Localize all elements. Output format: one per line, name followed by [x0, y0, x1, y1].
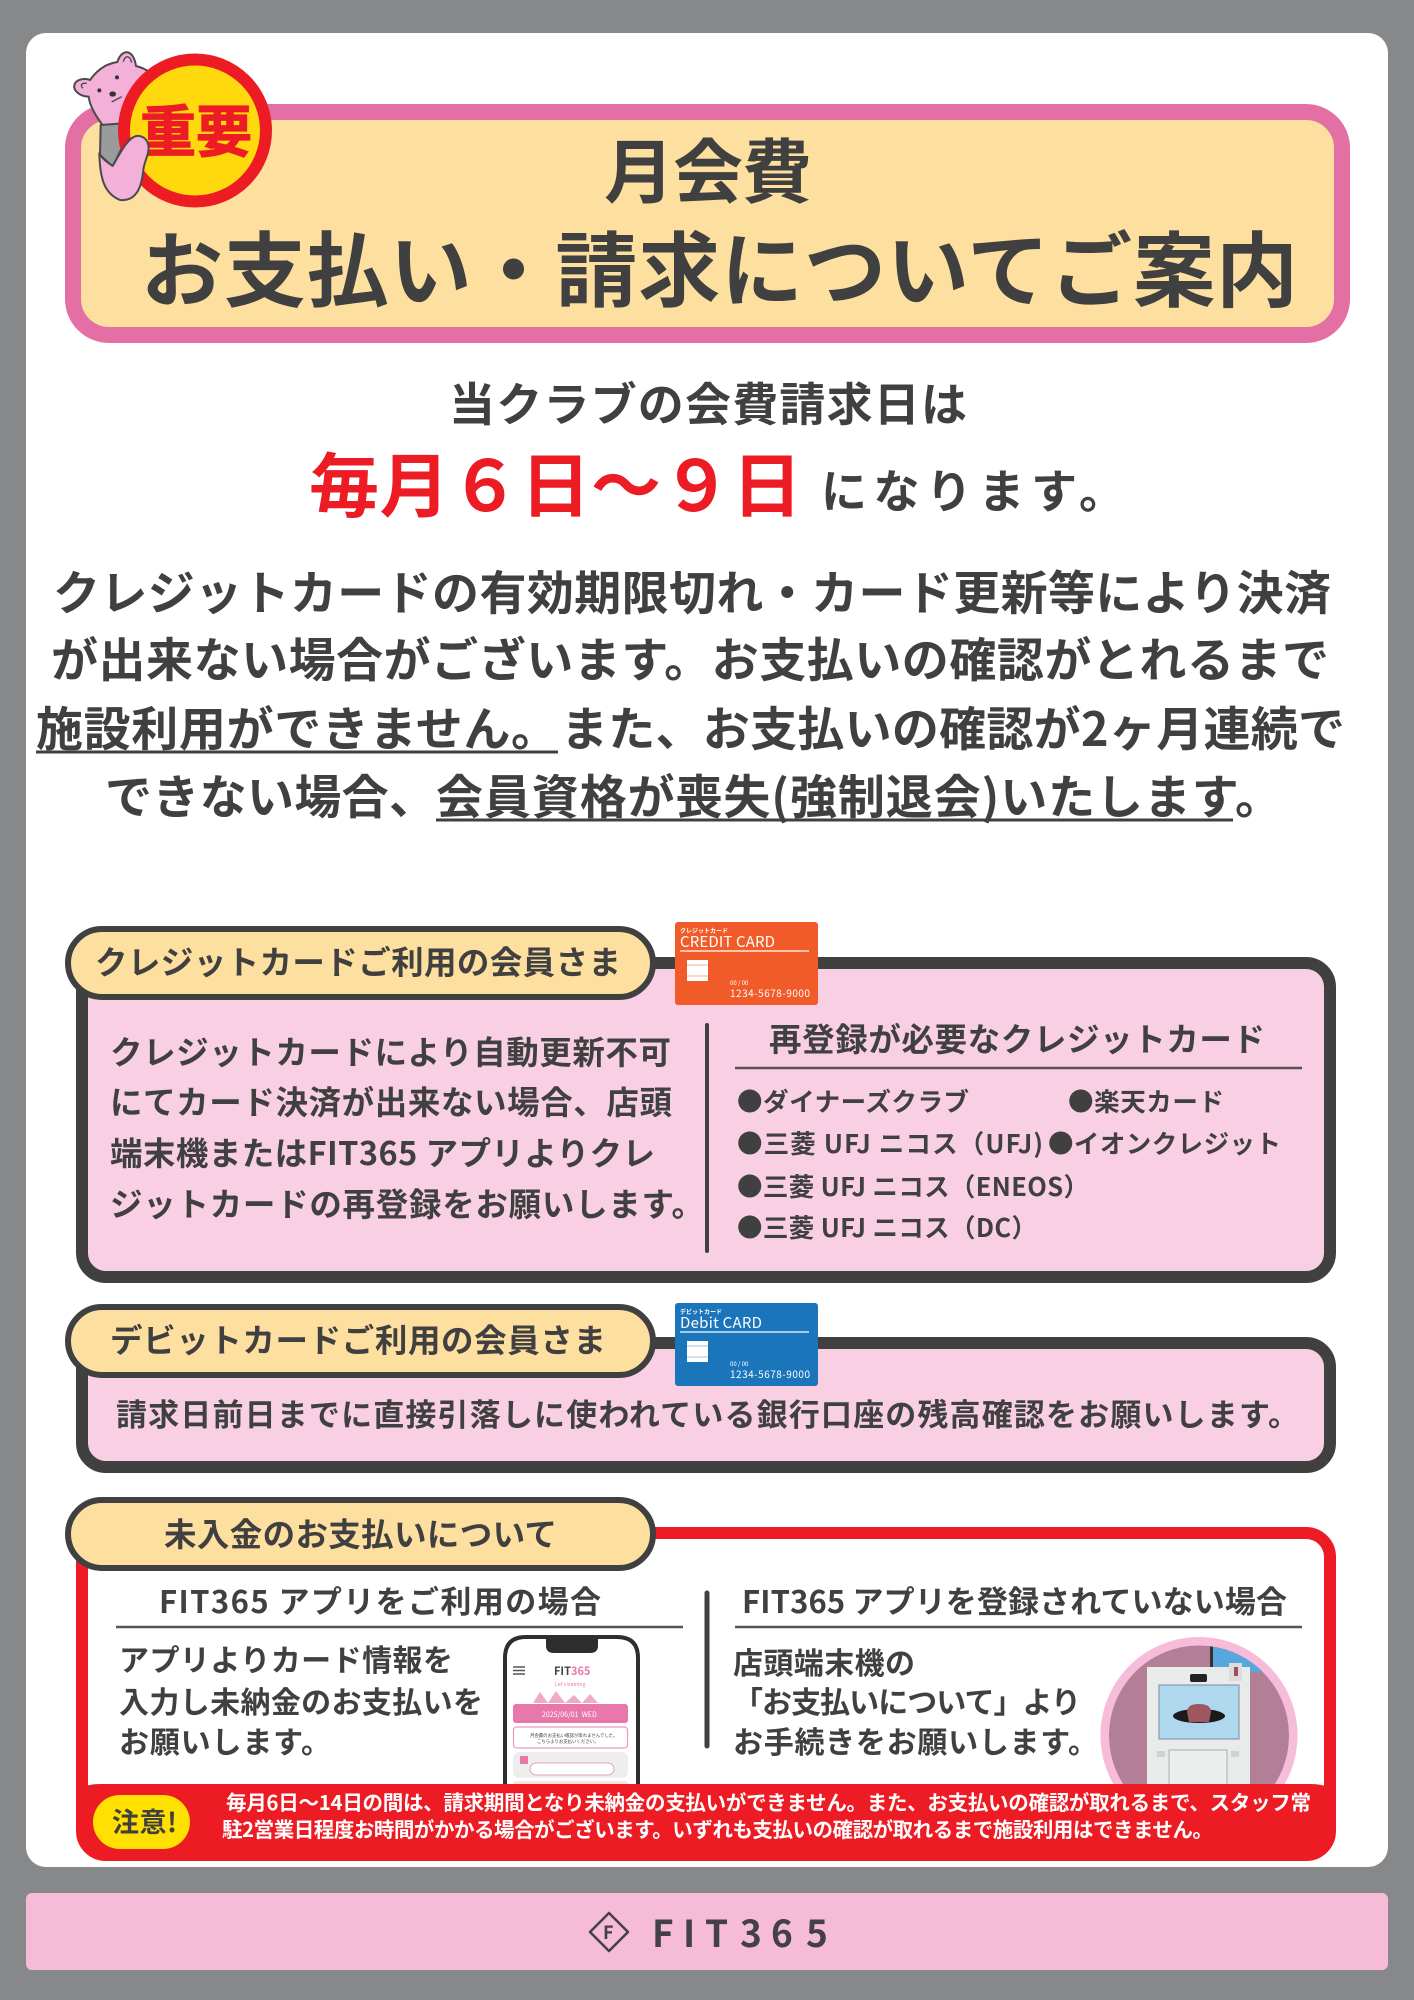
caution text: [222, 1786, 1311, 1843]
re-registration list: ●楽天カード: [1068, 1082, 1224, 1119]
debit card explanation: 請求日前日までに直接引落しに使われている銀行口座の残高確認をお願いします。: [116, 1390, 1299, 1435]
column heading: FIT365 アプリを登録されていない場合: [742, 1577, 1287, 1622]
column text: お願いします。: [119, 1718, 331, 1762]
re-registration list: ●三菱 UFJ ニコス（ENEOS）: [737, 1167, 1089, 1204]
panel: debit card members: [68, 1303, 1330, 1467]
warning paragraph: できない場合、: [105, 759, 436, 828]
icon: credit card: 1234-5678-9000: [730, 985, 810, 1000]
column heading: FIT365 アプリをご利用の場合: [159, 1577, 601, 1622]
photo: kiosk terminal: [1100, 1637, 1298, 1784]
credit card explanation: ジットカードの再登録をお願いします。: [110, 1179, 704, 1226]
re-registration list: ●ダイナーズクラブ: [737, 1082, 969, 1119]
icon: bear arm: [99, 136, 149, 200]
caution label: [93, 1795, 190, 1849]
column text: 入力し未納金のお支払いを: [119, 1678, 483, 1722]
icon: debit card: [675, 1303, 818, 1386]
billing date suffix: になります。: [821, 456, 1125, 522]
credit card explanation: 端末機またはFIT365 アプリよりクレ: [110, 1128, 655, 1175]
column: non-app users: [734, 1586, 1302, 1784]
column: app users: [116, 1577, 683, 1790]
icon: credit card: 00 / 00: [730, 978, 749, 987]
pill heading: unpaid: 未入金のお支払いについて: [164, 1509, 557, 1556]
logo mark: F: [603, 1919, 614, 1945]
column text: [733, 1639, 1098, 1762]
billing date emphasis: 毎月６日～９日: [309, 431, 802, 532]
list heading: 再登録が必要なクレジットカード: [769, 1014, 1265, 1061]
icon: credit card: クレジットカード: [680, 926, 728, 935]
caution label: 注意!: [112, 1801, 177, 1840]
icon: smartphone app screen: [505, 1637, 638, 1790]
logo mark: [590, 1913, 628, 1951]
re-registration list: [735, 1014, 1302, 1245]
re-registration list: ●三菱 UFJ ニコス（UFJ): [737, 1124, 1043, 1161]
warning paragraph: 施設利用ができません。: [36, 691, 558, 760]
title banner: [73, 112, 1342, 335]
warning paragraph: 会員資格が喪失(強制退会)いたします。: [436, 759, 1282, 828]
panel: unpaid fees: [68, 1500, 1336, 1860]
icon: smartphone app screen: 月会費のお支払い確認が取れませんでした。: [530, 1732, 617, 1739]
icon: credit card: CREDIT CARD: [680, 931, 775, 952]
icon: smartphone app screen: Let's training: [555, 1681, 585, 1688]
pill heading: credit card: [68, 929, 653, 997]
badge: 重要: [124, 60, 266, 202]
icon: smartphone app screen: 2025/06/01 WED: [542, 1710, 597, 1720]
caution text: 駐2営業日程度お時間がかかる場合がございます。いずれも支払いの確認が取れるまで施設利用はできません。: [222, 1813, 1213, 1843]
credit card explanation: クレジットカードにより自動更新不可: [110, 1027, 671, 1074]
warning paragraph: また、お支払いの確認が2ヶ月連続で: [561, 691, 1345, 760]
icon: debit card: 1234-5678-9000: [730, 1366, 810, 1381]
warning paragraph: [36, 555, 1345, 828]
pill heading: debit card: デビットカードご利用の会員さま: [110, 1315, 606, 1362]
badge: 重要: 重要: [140, 88, 252, 169]
icon: debit card: 00 / 00: [730, 1359, 749, 1368]
icon: smartphone app screen: FIT365: [554, 1663, 590, 1679]
caution band: [76, 1784, 1336, 1860]
column text: 「お支払いについて」より: [733, 1678, 1081, 1722]
icon: credit card: [675, 922, 818, 1005]
column text: アプリよりカード情報を: [119, 1636, 453, 1680]
billing date heading: 当クラブの会費請求日は: [449, 369, 967, 435]
re-registration list: ●イオンクレジット: [1048, 1124, 1281, 1161]
footer bar: [26, 1893, 1388, 1970]
column text: [119, 1636, 483, 1762]
pill heading: credit card: クレジットカードご利用の会員さま: [95, 937, 621, 984]
panel: credit card members: [68, 922, 1330, 1277]
column text: お手続きをお願いします。: [733, 1718, 1098, 1762]
pill heading: unpaid: [68, 1500, 653, 1568]
warning paragraph: が出来ない場合がございます。お支払いの確認がとれるまで: [51, 622, 1329, 691]
icon: smartphone app screen: こちらよりお支払いください。: [537, 1738, 598, 1745]
column text: 店頭端末機の: [733, 1639, 915, 1683]
logo wordmark: FIT365: [652, 1904, 828, 1958]
title line 2: お支払い・請求についてご案内: [141, 205, 1298, 324]
icon: debit card: Debit CARD: [680, 1312, 762, 1333]
warning paragraph: クレジットカードの有効期限切れ・カード更新等により決済: [53, 555, 1331, 624]
icon: pink bear behind badge: [74, 52, 150, 167]
credit card explanation: にてカード決済が出来ない場合、店頭: [110, 1077, 672, 1124]
credit card explanation: [110, 1027, 704, 1226]
pill heading: debit card: [68, 1307, 653, 1375]
caution text: 毎月6日～14日の間は、請求期間となり未納金の支払いができません。また、お支払いの確認が取れるまで、スタッフ常: [226, 1786, 1311, 1816]
icon: debit card: デビットカード: [680, 1307, 722, 1316]
re-registration list: ●三菱 UFJ ニコス（DC）: [737, 1208, 1037, 1245]
title line 1: 月会費: [604, 117, 812, 218]
